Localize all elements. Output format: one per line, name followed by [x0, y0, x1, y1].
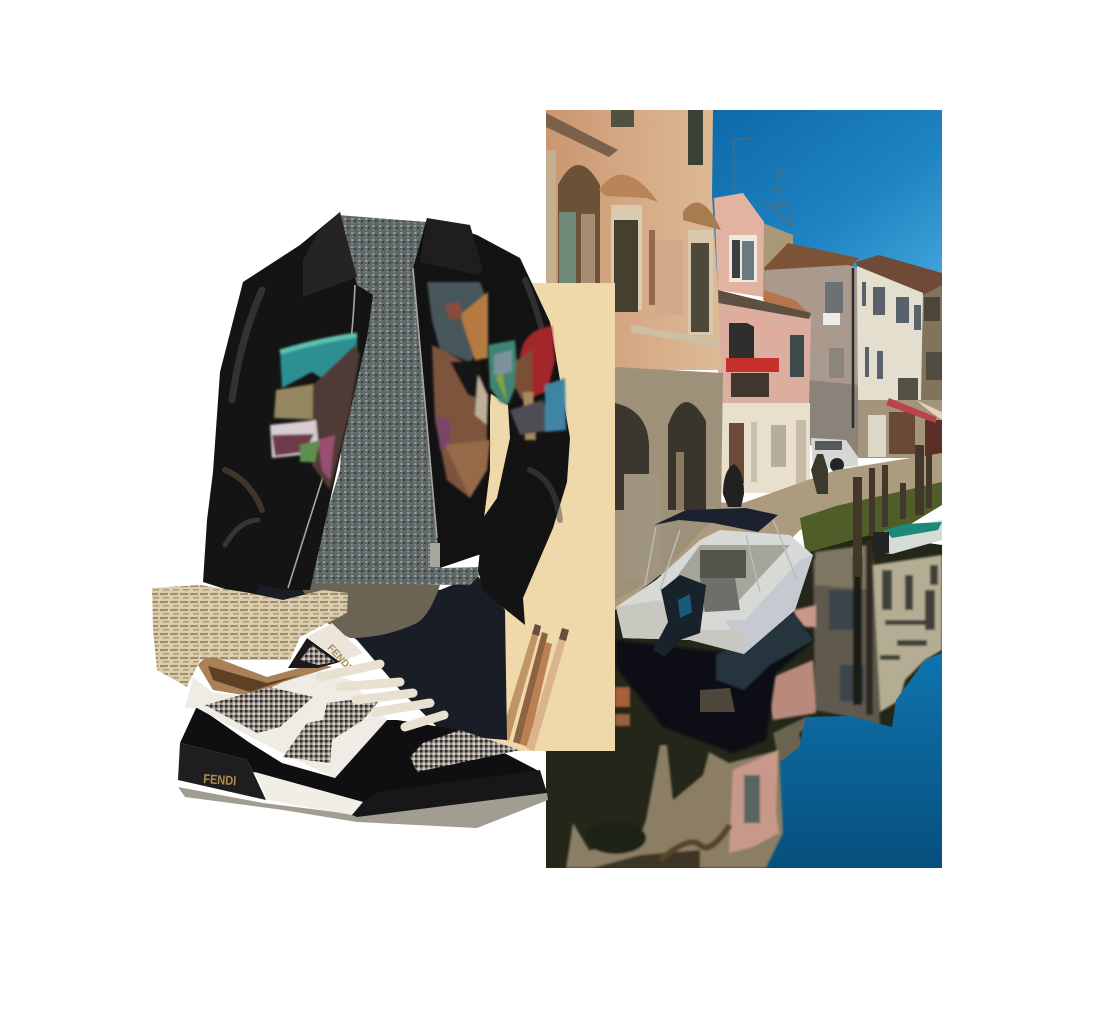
rear tan tower — [763, 223, 793, 300]
beige backing panel — [484, 283, 615, 751]
photo: Venetian canal — [546, 110, 942, 868]
reflected buildings — [766, 540, 942, 762]
roofs — [764, 243, 942, 295]
laces — [320, 664, 444, 727]
left jacket panel — [203, 212, 373, 598]
white house — [857, 266, 923, 402]
shopfronts and awnings — [858, 398, 942, 458]
pedestrians — [723, 454, 828, 507]
outfit: jacket, sweater, bag, trousers — [203, 212, 570, 740]
newspaper scrap — [152, 585, 348, 687]
white body — [185, 670, 387, 778]
stone ground floor — [615, 367, 723, 600]
blue water — [766, 653, 942, 868]
right sleeve artwork — [488, 326, 566, 440]
leather highlights — [225, 280, 560, 545]
pencils — [500, 624, 569, 751]
right sleeve — [470, 235, 570, 625]
cupsole heel — [178, 743, 266, 800]
small green boat — [873, 520, 942, 554]
collars — [303, 212, 357, 297]
collar lining — [198, 657, 332, 695]
zips — [288, 268, 437, 588]
tongue logo: FENDI — [325, 643, 353, 672]
sweater — [305, 215, 487, 585]
collage — [152, 110, 942, 868]
houndstooth panels — [205, 687, 313, 733]
belt bag — [297, 580, 440, 638]
tongue label — [307, 623, 363, 662]
right artwork: figure — [427, 282, 490, 498]
white car — [811, 438, 858, 472]
trousers — [255, 575, 507, 740]
lower left reflection — [566, 687, 783, 868]
toe-side hound behind tongue — [288, 638, 340, 668]
pink house — [714, 193, 811, 493]
canopy — [654, 508, 778, 532]
water base — [546, 535, 942, 868]
antennas — [732, 138, 791, 227]
motor boat — [616, 508, 813, 657]
FENDI wordmark: FENDI — [203, 771, 237, 788]
right body panel — [413, 218, 500, 568]
white wedge — [255, 772, 363, 815]
main palazzo — [546, 110, 723, 600]
back right building — [921, 278, 942, 403]
outsole — [178, 787, 548, 828]
outboard motor — [653, 575, 706, 657]
sky — [700, 110, 942, 290]
mooring poles — [853, 445, 932, 577]
grey house — [766, 265, 858, 458]
sneaker — [178, 623, 548, 828]
cupsole forefoot — [352, 770, 547, 817]
quay — [615, 453, 942, 610]
upper arch window — [558, 165, 600, 283]
zipper pull — [430, 543, 440, 567]
boat reflection — [616, 613, 814, 753]
left artwork — [270, 333, 360, 490]
black suede upper — [180, 706, 540, 802]
